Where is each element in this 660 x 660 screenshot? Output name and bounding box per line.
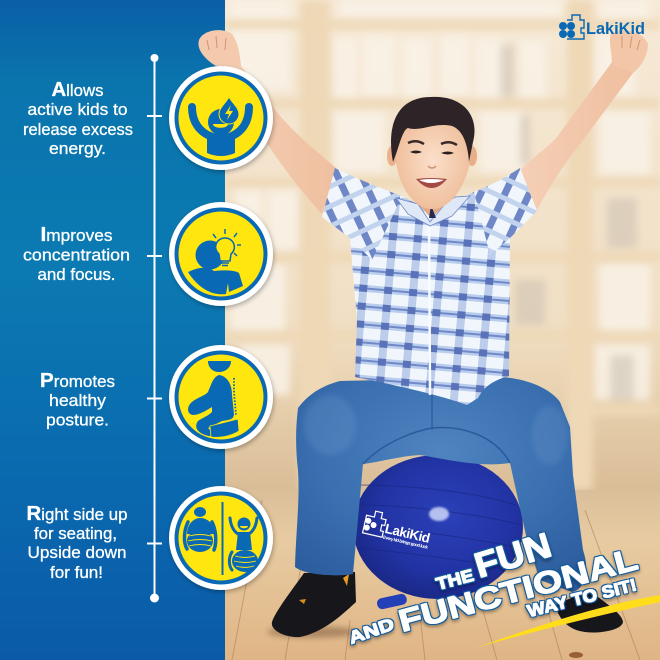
- ball logo: Every kid brings good luck: [383, 535, 429, 550]
- text: right side up: Right side up: [26, 503, 127, 525]
- left raised arm: [198, 30, 336, 214]
- text: allows active kids: [23, 79, 133, 158]
- icon badge 2: concentration bulb: [169, 202, 273, 306]
- left shoe: [267, 572, 357, 638]
- text: improves concentration: Improves: [40, 224, 112, 246]
- right shoe: [555, 590, 623, 633]
- text: promotes posture: posture.: [46, 412, 109, 430]
- slogan: the fun and functional way to sit: WAY TO SIT!: [525, 575, 639, 621]
- timeline line with ticks: [147, 54, 162, 602]
- upside-down figure: [229, 518, 258, 572]
- text: right side up: for seating,: [34, 525, 117, 543]
- hair: [391, 97, 475, 162]
- LakiKid logo: LakiKid: [586, 20, 645, 38]
- text: promotes posture: [40, 370, 115, 430]
- text: allows active kids: Allows: [52, 79, 104, 101]
- jeans: [295, 377, 586, 592]
- text: improves concentration: [23, 224, 130, 284]
- text: promotes posture: healthy: [49, 392, 107, 410]
- head: [387, 97, 477, 218]
- plaid shirt: [322, 168, 537, 405]
- text: right side up: for fun!: [50, 564, 103, 582]
- text: improves concentration: and focus.: [38, 266, 116, 284]
- LakiKid logo: [559, 15, 645, 39]
- slogan: the fun and functional way to sit: FUNCTIONAL: [395, 541, 641, 639]
- text: allows active kids: active kids to: [28, 101, 128, 119]
- background: blurred bookshelf wall: [225, 0, 660, 660]
- ball: [353, 455, 523, 610]
- text: right side up: Upside down: [28, 544, 126, 562]
- text: allows active kids: energy.: [49, 140, 106, 158]
- slogan: the fun and functional way to sit: [346, 526, 641, 648]
- slogan: the fun and functional way to sit: FUN: [470, 526, 556, 586]
- yellow swoosh: [478, 595, 660, 647]
- icon badge 3: healthy posture: [169, 345, 273, 449]
- text: allows active kids: release excess: [23, 121, 133, 139]
- ball logo: LakiKid: [383, 521, 432, 546]
- ball logo: [362, 509, 434, 550]
- slogan: the fun and functional way to sit: THE: [434, 566, 476, 594]
- sitting figure: [184, 507, 216, 552]
- slogan: the fun and functional way to sit: AND: [346, 615, 397, 648]
- text: improves concentration: concentration: [23, 246, 130, 264]
- text: right side up: [26, 503, 127, 582]
- left blue panel: [0, 0, 225, 660]
- icon badge 4: right side up and upside down: [169, 486, 273, 590]
- wooden floor: [225, 490, 660, 660]
- boy photo: [198, 30, 648, 638]
- right raised arm: [521, 30, 648, 210]
- text: promotes posture: Promotes: [40, 370, 115, 392]
- icon badge 1: energy release: [169, 66, 273, 170]
